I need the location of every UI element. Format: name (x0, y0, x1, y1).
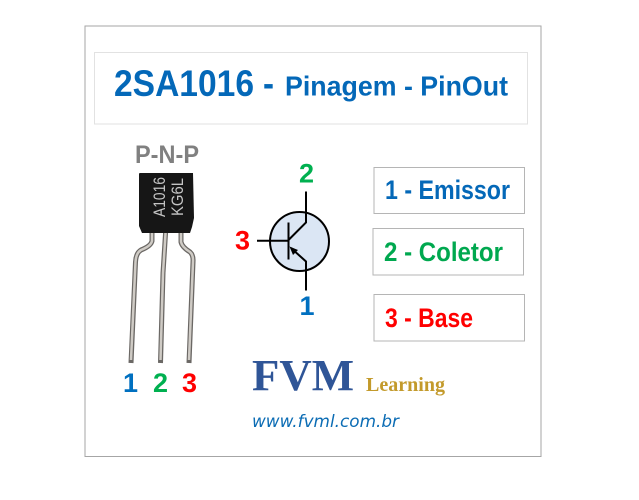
schematic pin numbers: 3 (235, 226, 250, 256)
FVM Learning logo: FVM (252, 351, 354, 400)
legend: base: 3 - Base (385, 303, 473, 333)
body marking (150, 177, 187, 217)
title panel (94, 52, 528, 124)
emitter arrow (290, 246, 298, 255)
legend: emissor (374, 168, 524, 214)
legend: coletor (373, 228, 524, 275)
pin numbers under photo: 3 (182, 368, 197, 398)
legend: emissor: 1 - Emissor (385, 175, 510, 205)
legend: base (374, 294, 524, 341)
FVM Learning logo: Learning (366, 374, 445, 396)
body marking: KG6L (168, 178, 187, 216)
body marking: A1016 (150, 177, 169, 217)
schematic pin numbers: 2 (299, 158, 314, 188)
schematic pin numbers (235, 158, 315, 321)
outer frame (85, 26, 541, 456)
transistor schematic symbol (257, 192, 329, 290)
FVM Learning logo (252, 351, 445, 400)
transistor photo illustration (131, 173, 194, 363)
pin numbers under photo (123, 368, 197, 398)
legend: coletor: 2 - Coletor (384, 237, 503, 267)
pin numbers under photo: 1 (123, 368, 138, 398)
title panel: 2SA1016 (114, 63, 254, 104)
P-N-P label: P-N-P (135, 141, 199, 169)
schematic pin numbers: 1 (300, 291, 315, 321)
transistor body (139, 173, 194, 233)
transistor leads (131, 226, 193, 363)
title panel: - (263, 63, 274, 104)
pin numbers under photo: 2 (153, 368, 168, 398)
website url: www.fvml.com.br (252, 412, 400, 431)
title panel: Pinagem - PinOut (285, 70, 508, 102)
